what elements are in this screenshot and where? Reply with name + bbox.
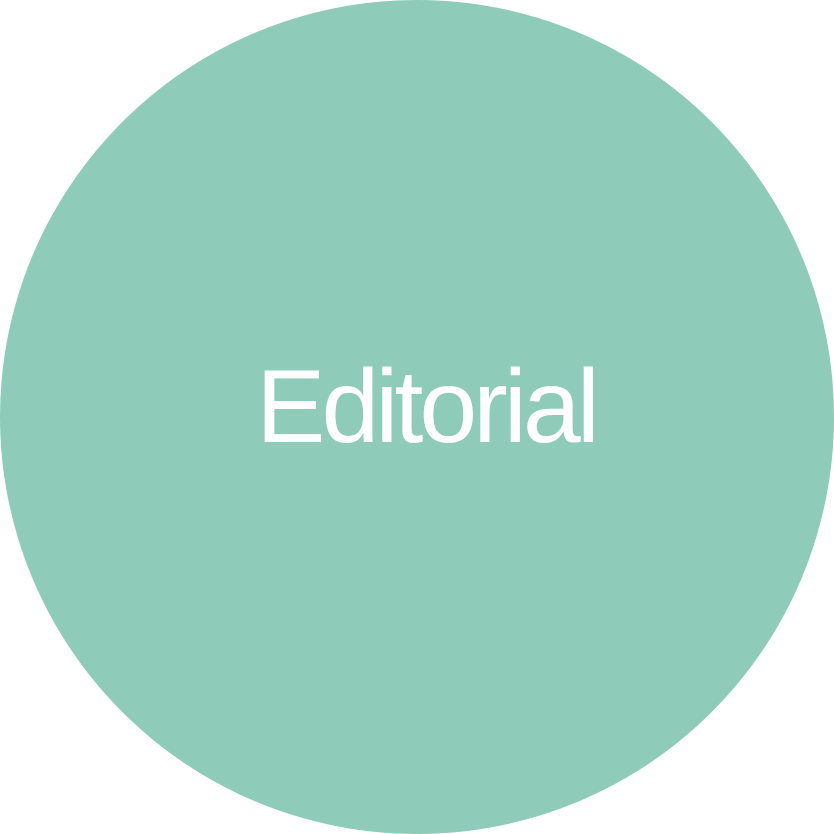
title: Editorial: Editorial — [256, 349, 596, 465]
